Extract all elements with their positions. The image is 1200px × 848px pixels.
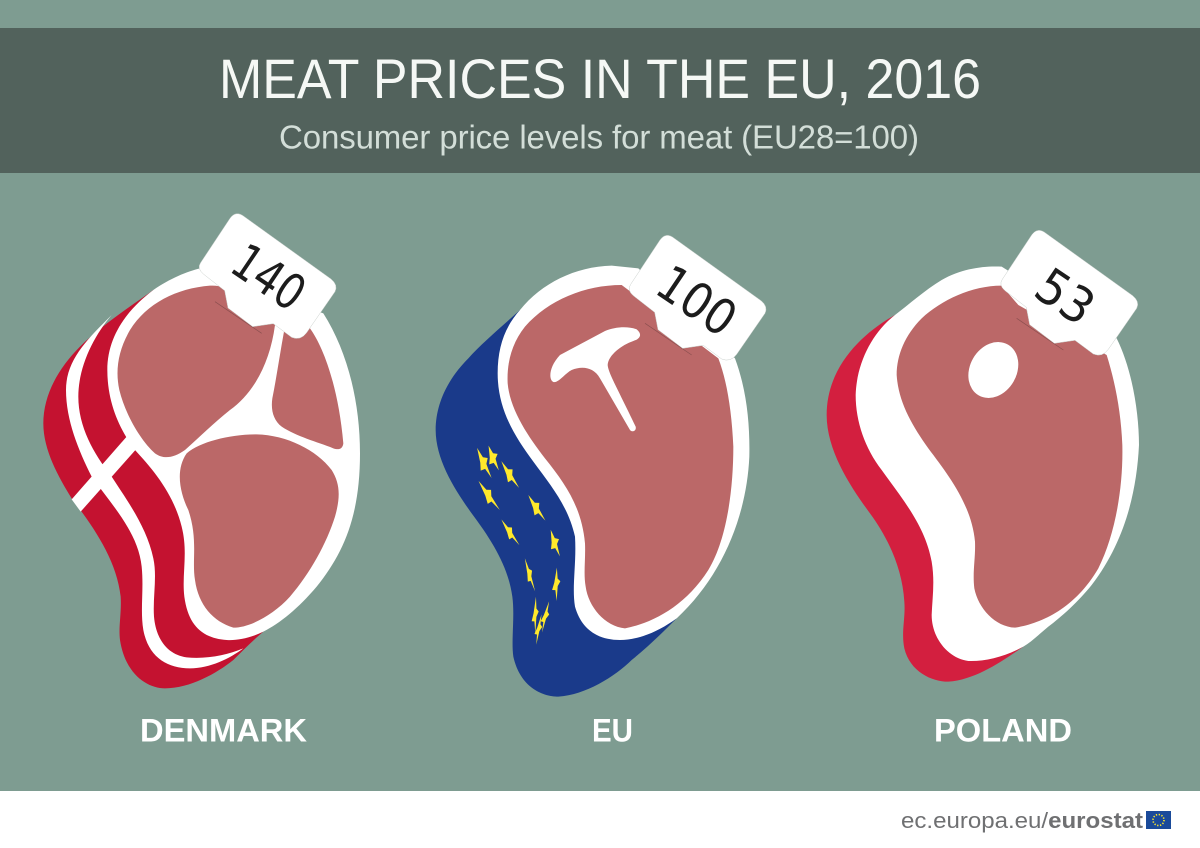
price value: 140	[221, 232, 316, 323]
red fat layer	[827, 315, 1023, 682]
panel: EU steak	[436, 235, 766, 697]
price value: 53	[1025, 256, 1105, 337]
source text: ec.europa.eu/ eurostat	[901, 808, 1144, 833]
panel: Denmark steak	[43, 214, 360, 688]
round bone	[958, 333, 1028, 407]
meat cut right	[272, 328, 343, 449]
white fat body	[856, 266, 1139, 661]
meat	[508, 285, 733, 628]
price tag 140	[199, 214, 336, 338]
footer	[0, 791, 1200, 848]
white fat body	[107, 268, 360, 640]
meat cut top left	[118, 286, 275, 457]
blue fat layer	[436, 310, 677, 697]
meat	[897, 286, 1122, 628]
label: Poland: POLAND	[934, 712, 1072, 748]
crease line	[215, 302, 262, 333]
panel: Poland steak	[827, 230, 1139, 682]
crease line	[645, 323, 692, 355]
price tag 100	[629, 235, 766, 360]
icon: EU flag	[1146, 811, 1171, 829]
T-bone	[550, 327, 640, 431]
white flag cross bar	[72, 437, 136, 512]
white fat body	[498, 266, 749, 640]
price value: 100	[646, 254, 747, 348]
label: Denmark: DENMARK	[140, 712, 308, 748]
crease line	[1017, 318, 1063, 350]
price tag 53	[1001, 230, 1138, 355]
subtitle: Consumer price levels for meat (EU28=100)	[279, 118, 919, 156]
meat cut bottom	[180, 434, 339, 628]
red fat layer	[43, 290, 263, 688]
yellow distorted stars	[472, 444, 563, 645]
header band	[0, 28, 1200, 173]
title: MEAT PRICES IN THE EU, 2016	[219, 47, 981, 110]
white flag stripe	[66, 315, 243, 668]
label: EU: EU	[592, 712, 633, 748]
